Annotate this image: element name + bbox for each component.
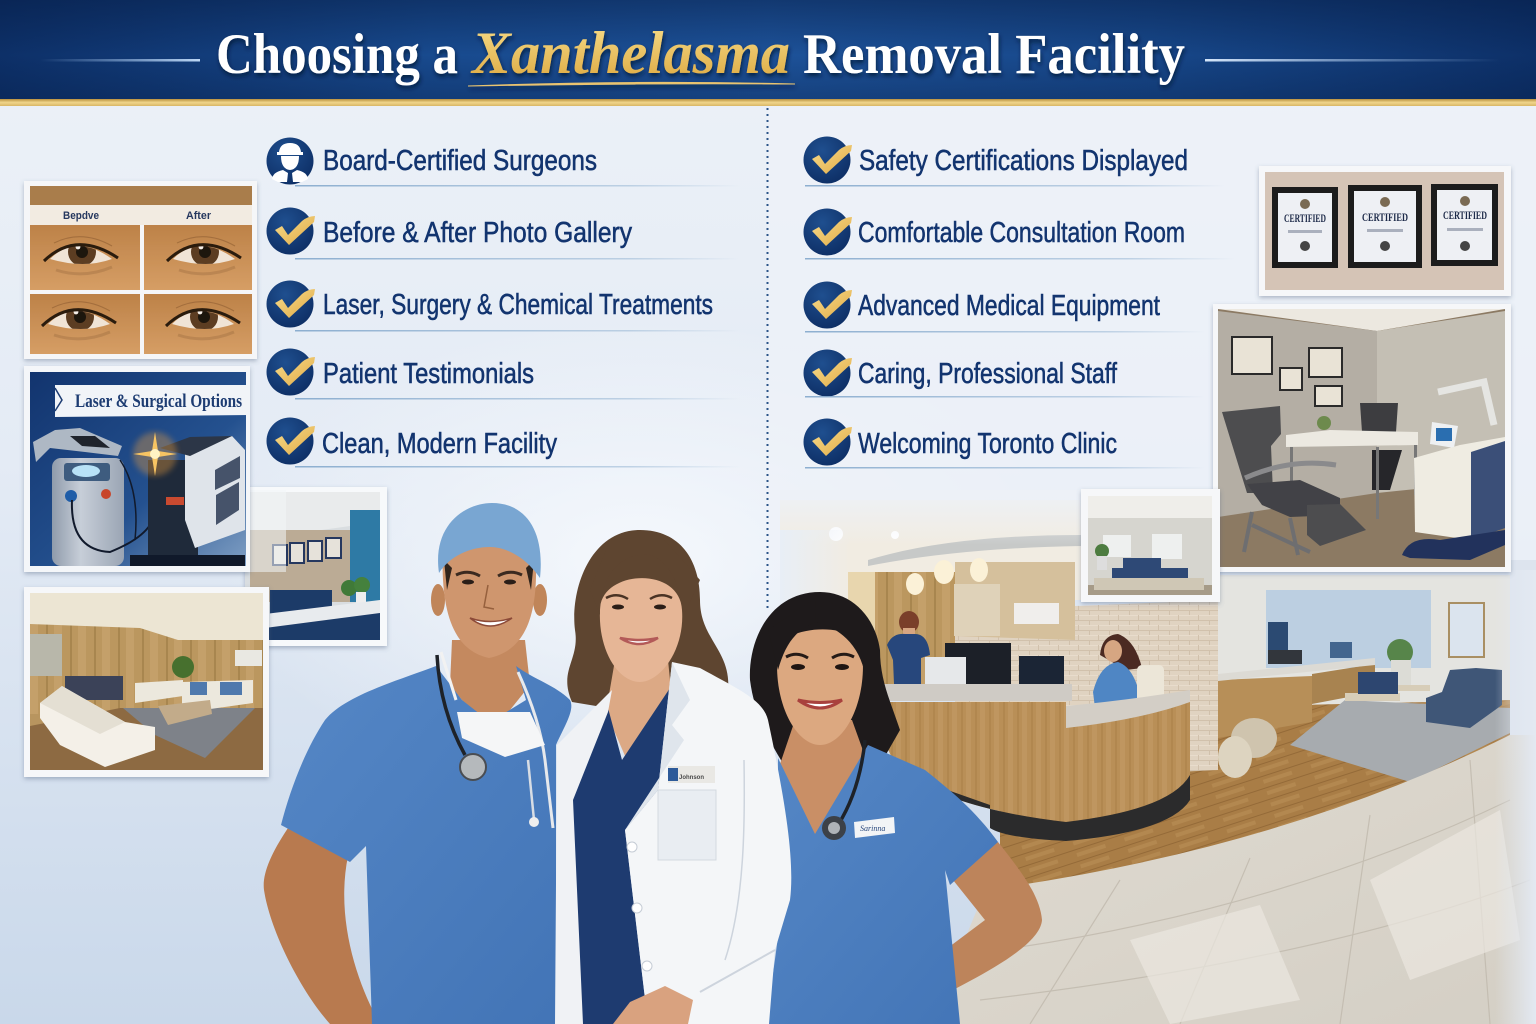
treatment chair [1222,406,1366,555]
title: Xanthelasma [470,20,790,86]
stools [1218,718,1277,778]
arm [850,842,1042,1024]
face [443,545,536,658]
ears [431,584,547,616]
scrubs [765,745,998,1024]
label: after: After [186,210,212,222]
item: board-certified surgeons: Board-Certified Surgeons [323,145,597,177]
monitors [925,643,1064,687]
photo: lounge [24,587,269,777]
neck and chest [606,660,672,772]
sand wall [955,562,1075,642]
name badge [668,766,715,783]
title: Removal Facility [803,23,1185,86]
icon: check 6 [804,208,852,256]
coffee table [1345,672,1430,701]
icon: check 7 [804,282,852,328]
face [600,578,682,682]
face [777,629,863,745]
hair [750,592,900,775]
wall art [1449,603,1484,657]
curved ceiling soffit [868,535,1081,566]
photo: small reception room [245,487,387,646]
arm [264,828,380,1024]
item: toronto clinic: Welcoming Toronto Clinic [858,428,1117,460]
pendant lights [829,527,988,595]
stethoscope [822,740,865,840]
brick wall [955,600,1218,790]
item: consultation room: Comfortable Consultation Room [858,217,1185,249]
hair [567,530,728,715]
marble veins [980,760,1530,1024]
doctor center [555,530,791,1024]
icon: check 1 [266,208,315,254]
photo: consultation room [1213,304,1511,572]
hair parting [768,598,872,670]
surgical mask [457,712,545,757]
laser flash [133,432,177,476]
title: Choosing a [216,23,458,86]
icon: check 3 [266,348,315,396]
icon: check 4 [266,418,315,464]
icon: check 9 [804,418,852,466]
stethoscope [437,652,553,828]
nurse right [750,592,1042,1024]
laser machine left [33,428,150,566]
facial features [786,654,854,708]
hair top [590,535,700,615]
certificate 1: CERTIFIED [1284,211,1326,225]
lobby scene [780,490,1536,1024]
cap [438,503,541,578]
item: safety certifications: Safety Certifications Displayed [859,145,1188,177]
certificate 2: CERTIFIED [1362,210,1408,224]
reception desk [883,684,1190,841]
navy scrubs [572,688,672,1024]
label: before: Bepdve [63,210,99,222]
facial features [606,595,672,644]
wood floor [1000,700,1510,892]
right checklist [804,136,1235,468]
facial features [456,572,522,626]
plant [1387,639,1413,688]
receptionist standing [887,611,930,684]
laser machine right [130,436,245,566]
left checklist [266,138,740,468]
icon: surgeon [266,138,314,184]
icon: check 8 [804,350,852,396]
icon: check 5 [804,136,852,184]
scrubs [281,666,571,1024]
wood wall panel [875,572,955,692]
right area wall [1218,575,1510,725]
art panel [1014,603,1059,624]
photo: before and after eyes [24,181,257,359]
desk and guest chair [1286,403,1418,519]
right fade [1495,570,1536,1024]
white coat [555,662,791,1024]
ceiling [780,500,1220,600]
item: treatments: Laser, Surgery & Chemical Treatments [323,289,713,321]
name badge [854,817,895,838]
certificate 1 [1272,187,1338,268]
center dotted divider [766,108,768,612]
certificate 3: CERTIFIED [1443,208,1487,222]
laser cart [1402,382,1505,560]
hand [613,986,693,1024]
certificate 3 [1431,184,1498,266]
hair sides [444,560,534,590]
name badge: Johnson [679,775,704,781]
surgeon man [264,503,571,1024]
photo: laser and surgical options [24,366,286,572]
receptionist seated [1093,634,1164,708]
item: before and after gallery: Before & After Photo Gallery [323,217,632,249]
neck [450,640,530,735]
item: clean facility: Clean, Modern Facility [322,428,557,460]
header banner [0,0,1536,106]
side counter [1218,642,1375,738]
item: equipment: Advanced Medical Equipment [858,290,1160,322]
item: testimonials: Patient Testimonials [323,358,534,390]
icon: check 2 [266,280,315,328]
armchairs [1426,668,1502,728]
top and left lobby fade [780,490,1220,545]
photo: small waiting area [1081,489,1220,602]
wall frames [1232,337,1342,406]
neck and chest [778,720,870,835]
marble floor [930,735,1536,1024]
photo: certified frames [1259,166,1511,296]
rug [1290,700,1510,782]
item: staff: Caring, Professional Staff [858,358,1118,390]
certificate 2 [1348,185,1422,268]
banner text: Laser & Surgical Options [75,391,242,412]
title [216,20,1185,86]
name badge: Sarinna [860,824,885,833]
glass partition [1266,590,1431,668]
